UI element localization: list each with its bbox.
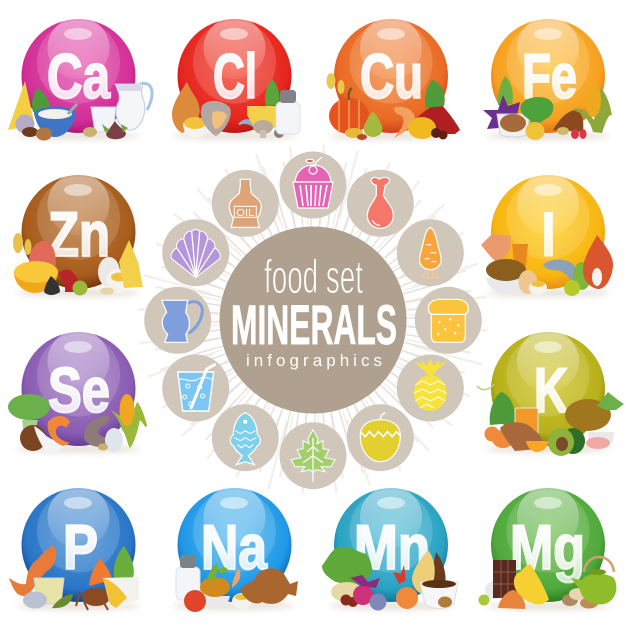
nuts <box>22 127 52 140</box>
tile: Se <box>8 330 147 453</box>
title: food set: food set <box>264 250 363 303</box>
tile: Mg <box>478 486 616 610</box>
herb <box>597 392 624 410</box>
radish <box>571 129 586 139</box>
subtitle: infographics: infographics <box>246 351 382 370</box>
sphere <box>178 17 292 133</box>
wheat <box>13 233 32 255</box>
icon: oil bottle <box>212 170 279 237</box>
ham <box>172 82 200 133</box>
icon: bread <box>415 287 482 354</box>
salt shaker <box>176 555 200 600</box>
lime <box>478 594 490 606</box>
gooseberry <box>72 280 88 296</box>
peanut <box>100 288 114 294</box>
carrot <box>512 244 528 270</box>
salt shaker <box>276 90 300 134</box>
spoon <box>68 104 77 114</box>
foods <box>477 384 624 456</box>
green peas <box>265 79 280 106</box>
cheese wheel <box>14 261 58 293</box>
lime <box>564 280 580 296</box>
symbol Zn: Zn <box>48 200 110 270</box>
sphere <box>334 17 448 133</box>
nuts <box>562 588 598 608</box>
fish <box>543 260 576 285</box>
foods <box>176 555 298 612</box>
seaweed in bowl <box>565 399 614 446</box>
spinach <box>520 97 553 125</box>
chestnuts <box>431 128 448 140</box>
icon: coconut <box>347 404 414 471</box>
corn <box>585 83 601 117</box>
shrimp slices <box>586 437 610 449</box>
egg <box>518 270 538 294</box>
icon: seashell <box>162 219 229 286</box>
meat <box>417 104 460 134</box>
green peas <box>32 88 50 112</box>
sphere <box>491 330 605 446</box>
green peas <box>425 80 445 108</box>
beet <box>350 575 380 605</box>
bay leaves <box>52 594 73 608</box>
fish body <box>240 568 298 604</box>
yellow pear <box>526 122 544 140</box>
squid <box>481 234 511 264</box>
ham <box>89 558 112 586</box>
peanut <box>345 128 363 138</box>
sunflower seed <box>44 276 60 295</box>
pumpkin <box>329 88 369 134</box>
green peas <box>114 546 134 578</box>
sphere <box>491 173 605 289</box>
tile: Zn <box>13 173 143 297</box>
foods <box>8 81 152 140</box>
caviar bowl <box>200 577 230 608</box>
icon: leaf <box>280 422 346 489</box>
icon: pineapple <box>397 354 464 422</box>
pistachio <box>83 127 97 137</box>
ham <box>583 235 613 289</box>
foods <box>13 233 143 296</box>
sphere <box>22 17 136 133</box>
title: MINERALS: MINERALS <box>231 293 397 356</box>
cheese <box>103 577 139 609</box>
lobster <box>184 590 206 612</box>
foods <box>322 547 458 610</box>
foods <box>9 545 139 610</box>
green plant <box>207 563 228 580</box>
shrimp <box>394 107 415 138</box>
icon: cupcake <box>280 152 346 218</box>
corn <box>120 394 134 426</box>
icon ring <box>144 152 482 489</box>
sphere <box>22 173 136 289</box>
wheat <box>326 73 344 94</box>
symbol Fe: Fe <box>522 42 577 112</box>
purple plant <box>483 95 520 129</box>
symbol Mg: Mg <box>510 513 585 583</box>
shrimp <box>48 416 70 446</box>
cheese wedge <box>8 81 34 130</box>
cheese <box>247 106 276 129</box>
icon: oil bottle: OIL <box>236 208 255 219</box>
green peas <box>498 76 513 105</box>
seaweed in bowl <box>486 259 526 294</box>
walnut <box>438 596 452 608</box>
cocoa pod <box>412 550 446 594</box>
apricot <box>396 587 418 609</box>
lemon <box>408 117 436 139</box>
foods <box>326 73 460 140</box>
sphere <box>22 330 136 446</box>
coconut <box>20 425 66 453</box>
symbol Cl: Cl <box>213 42 257 112</box>
corn leaves <box>572 88 612 133</box>
garlic <box>16 114 34 134</box>
chocolate bar <box>493 560 516 598</box>
avocado <box>548 428 585 456</box>
peach <box>484 426 514 448</box>
teapot <box>571 557 616 604</box>
symbol Se: Se <box>48 356 110 426</box>
tile: Cl <box>172 17 300 140</box>
pea tendril <box>477 384 494 390</box>
fig leaves <box>102 124 128 132</box>
red meat <box>58 269 80 292</box>
corn leaves <box>111 402 147 448</box>
crab <box>76 588 116 610</box>
tea cup <box>497 114 530 137</box>
icon: carrot <box>397 219 464 286</box>
milk jug <box>115 83 152 130</box>
symbol Na: Na <box>201 513 268 583</box>
symbol I: I <box>541 200 556 270</box>
orange slice <box>526 441 549 452</box>
symbol P: P <box>63 513 98 583</box>
symbol Mn: Mn <box>354 513 430 583</box>
foods <box>478 557 616 609</box>
tile: Na <box>172 486 298 612</box>
pear <box>364 112 382 137</box>
symbol Ca: Ca <box>47 42 111 112</box>
half egg <box>106 269 130 293</box>
pistachio <box>557 127 569 135</box>
chocolate meat <box>553 110 583 132</box>
sphere <box>178 486 292 602</box>
tile: Mn <box>322 486 458 610</box>
oyster <box>201 101 231 136</box>
foods <box>481 234 613 296</box>
fish <box>9 545 56 596</box>
symbol Cu: Cu <box>360 42 423 112</box>
shrimp <box>232 568 240 588</box>
tile: Ca <box>8 17 152 140</box>
icon: fish <box>212 404 279 471</box>
pistachio <box>98 444 108 450</box>
spiral shell <box>84 416 110 447</box>
ginger <box>331 582 363 602</box>
ham <box>29 241 56 270</box>
icon: glass with straw <box>162 354 229 422</box>
green fruit <box>573 262 591 290</box>
half egg <box>529 281 547 295</box>
egg <box>105 428 123 452</box>
white cup <box>485 581 503 599</box>
central title disc <box>220 226 406 414</box>
egg in cup <box>183 117 208 138</box>
icon: chicken leg <box>347 170 414 237</box>
bowl of rice <box>34 106 76 137</box>
dried apricots <box>498 590 525 609</box>
foods <box>8 394 147 453</box>
tile: Fe <box>483 17 612 140</box>
tile: P <box>9 486 140 610</box>
mushrooms <box>253 120 284 138</box>
tile: K <box>477 330 624 456</box>
glass <box>34 578 64 604</box>
coffee cup <box>420 580 458 608</box>
fig <box>106 121 126 139</box>
cheese wedge <box>119 240 143 288</box>
half egg <box>232 593 252 609</box>
sphere <box>491 17 605 133</box>
sphere <box>22 486 136 602</box>
garlic <box>370 594 386 610</box>
sphere <box>334 486 448 602</box>
symbol K: K <box>534 356 568 426</box>
egg <box>98 257 120 287</box>
roast chicken <box>500 422 542 451</box>
icon: jug <box>144 287 211 354</box>
tile: Cu <box>326 17 460 140</box>
sphere <box>491 486 605 602</box>
foods <box>483 76 612 140</box>
spinach <box>322 547 372 585</box>
milk glass <box>91 107 116 132</box>
red bean <box>357 134 367 140</box>
anchovy <box>238 119 256 128</box>
tile: I <box>481 173 613 297</box>
rose hip <box>393 565 406 584</box>
broccoli <box>8 394 50 435</box>
chestnuts <box>340 594 358 607</box>
green peas <box>490 392 515 425</box>
clam <box>23 592 47 608</box>
bananas <box>514 564 549 604</box>
foods <box>172 79 300 138</box>
juice glass <box>515 408 538 436</box>
